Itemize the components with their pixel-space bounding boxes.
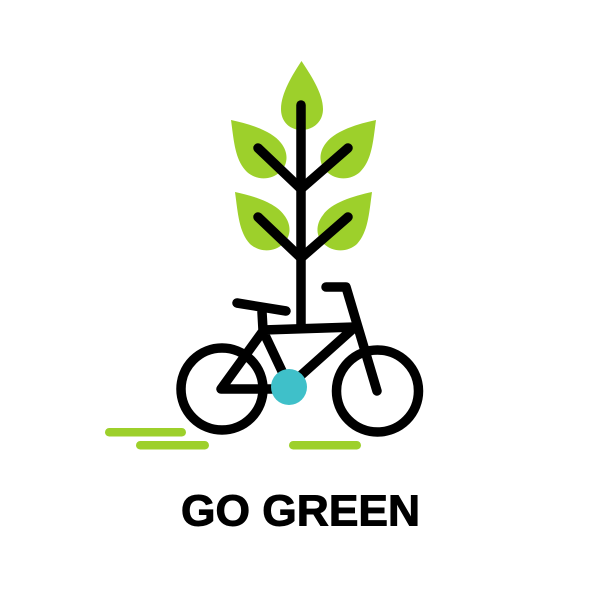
back wheel bbox=[181, 348, 263, 430]
leaf: top bbox=[281, 61, 323, 130]
leaf: lower right bbox=[317, 192, 372, 250]
front wheel bbox=[336, 350, 418, 432]
icon: teal pedal hub bbox=[271, 369, 307, 405]
fork and handlebar bbox=[326, 287, 377, 391]
leaf: lower left bbox=[235, 192, 290, 250]
saddle bbox=[237, 303, 286, 311]
leaf: upper right bbox=[320, 120, 376, 178]
title: GO GREEN bbox=[181, 486, 420, 536]
plant stem and branches bbox=[258, 105, 348, 328]
frame bbox=[221, 312, 355, 389]
ground lines bbox=[105, 428, 361, 450]
bicycle bbox=[181, 287, 418, 432]
plant leaves bbox=[231, 61, 376, 250]
leaf: upper left bbox=[231, 120, 287, 178]
